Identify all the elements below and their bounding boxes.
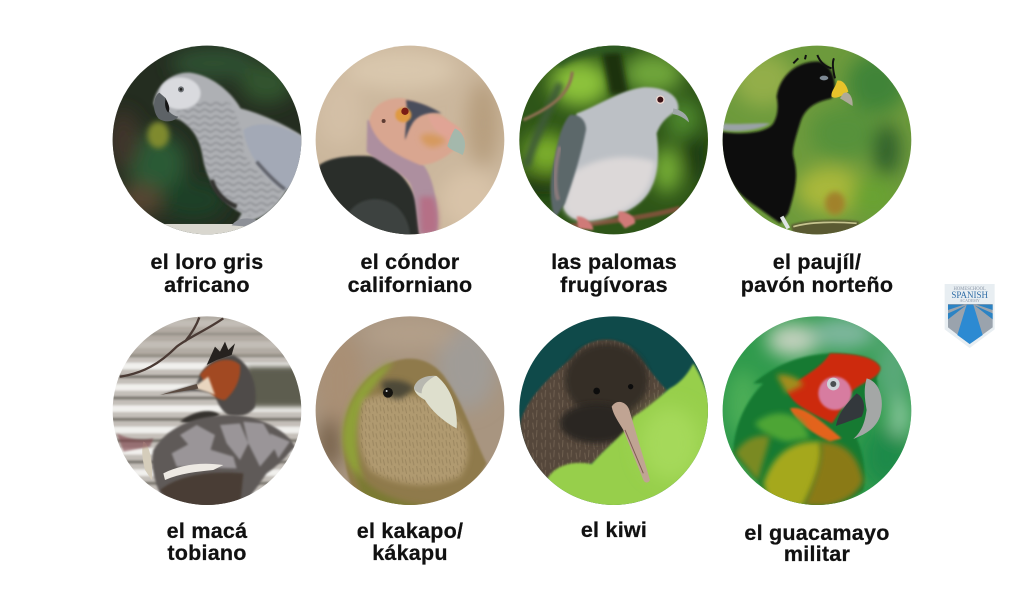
label: frugívoras bbox=[560, 273, 668, 297]
label: kákapu bbox=[372, 541, 448, 565]
photo: great curassow bbox=[720, 43, 917, 237]
label: el kiwi bbox=[581, 518, 647, 542]
panel: el loro gris africano bbox=[107, 43, 307, 297]
panel: el guacamayo militar bbox=[720, 313, 917, 566]
panel: el paujíl / pavón norteño bbox=[720, 43, 917, 297]
label: el macá bbox=[167, 519, 248, 543]
label: el guacamayo bbox=[744, 521, 890, 545]
label: el cóndor bbox=[360, 250, 460, 274]
label: las palomas bbox=[551, 250, 677, 274]
panel: el kakapo / kákapu bbox=[313, 313, 510, 565]
panel: el cóndor californiano bbox=[313, 43, 510, 297]
label: el kakapo/ bbox=[357, 519, 463, 543]
photo: kiwi bbox=[517, 313, 713, 510]
label: africano bbox=[164, 273, 250, 297]
label: californiano bbox=[348, 273, 472, 297]
photo: kakapo bbox=[313, 313, 510, 513]
label: tobiano bbox=[167, 541, 247, 565]
logo: Homeschool Spanish Academy: HOMESCHOOL bbox=[953, 287, 986, 292]
label: pavón norteño bbox=[741, 273, 893, 297]
label: militar bbox=[784, 542, 851, 566]
panel: las palomas frugívoras bbox=[517, 43, 713, 297]
logo: Homeschool Spanish Academy bbox=[945, 284, 995, 348]
logo: Homeschool Spanish Academy: SPANISH bbox=[951, 290, 988, 300]
photo: grey parrot bbox=[107, 43, 307, 237]
label: el paujíl/ bbox=[773, 250, 861, 274]
photo: military macaw bbox=[720, 313, 917, 510]
photo: california condor bbox=[313, 43, 510, 237]
photo: fruit dove bbox=[517, 43, 713, 237]
photo: hooded grebe bbox=[110, 313, 310, 510]
panel: el macá tobiano bbox=[110, 313, 310, 565]
logo: Homeschool Spanish Academy: ACADEMY bbox=[960, 298, 980, 303]
label: el loro gris bbox=[151, 250, 263, 274]
panel: el kiwi bbox=[517, 313, 713, 542]
